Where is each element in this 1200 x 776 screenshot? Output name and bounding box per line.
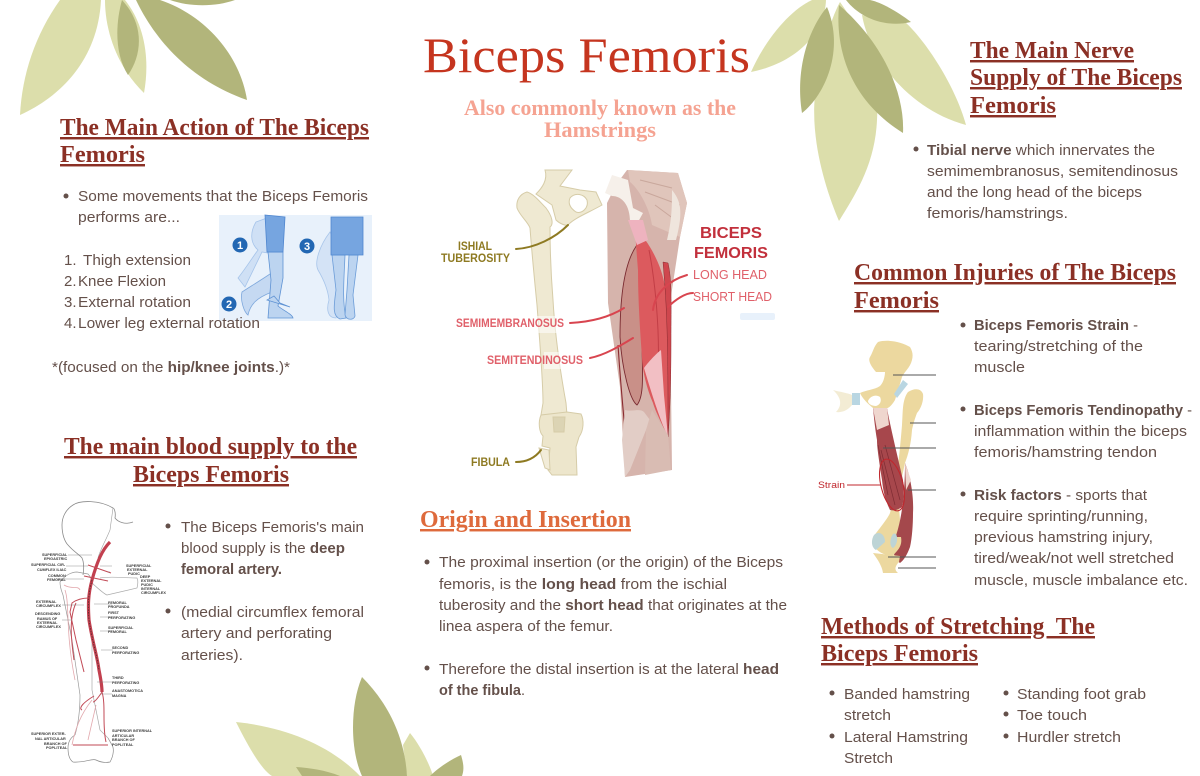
image: hamstring strain diagram [818,341,936,573]
text: common injuries [960,317,1192,589]
text: blood supply: The Biceps Femoris's main [181,519,364,536]
text: main action list: Lower leg external rotation [78,315,260,332]
text: blood supply: (medial circumflex femoral [181,604,364,621]
tendon and lower muscle highlight [644,350,668,437]
image: hamstring movement diagram: 1 [237,240,243,252]
image: femoral artery diagram: INTERNAL [141,587,161,591]
label lines [516,225,693,462]
decorative leaves: top left [20,0,247,115]
text: nerve supply: semimembranosus, semitendinosus [927,163,1178,180]
image: femoral artery diagram: RAMUS OF [37,617,58,621]
image: hamstring movement diagram: 3 [304,241,310,253]
text: common injuries: Risk factors - sports that [974,487,1148,504]
text: origin and insertion: femoris, is the long head from the ischial [439,576,727,593]
hip bone [517,170,602,475]
heading: blood supply: Biceps Femoris [133,461,289,488]
text: common injuries: previous hamstring injury, [974,529,1153,546]
text: common injuries: muscle [974,359,1025,376]
text: origin and insertion: tuberosity and the short head that originates at the [439,597,787,614]
text: origin and insertion [424,554,787,699]
text: origin and insertion: Therefore the distal insertion is at the lateral head [439,661,779,678]
image: femoral artery diagram: SUPERFICIAL [108,626,134,630]
leg outline [607,170,687,477]
text: common injuries: femoris/hamstring tendon [974,444,1157,461]
text: main action list [52,188,368,376]
heading: stretching methods [821,613,1095,667]
femur shaft and trochanter [517,192,567,415]
translucent label patches on the bone [536,316,564,333]
text: common injuries: Biceps Femoris Strain - [974,317,1138,334]
left pubic bone [833,390,852,412]
anatomy labels: FIBULA [471,457,510,469]
anatomy labels: ISHIAL [458,241,492,253]
heading: nerve supply: Supply of The Biceps [970,64,1182,91]
text: main action list: 3. [64,294,77,311]
image: femoral artery diagram: FEMORAL [47,578,66,582]
image: femoral artery diagram: DEEP [140,575,151,579]
text: common injuries: tearing/stretching of the [974,338,1143,355]
image: femoral artery diagram: MAGNA [112,694,127,698]
text: stretching methods, column two: Toe touch [1017,707,1087,724]
text: origin and insertion: The proximal insertion (or the origin) of the Biceps [439,554,783,571]
anatomy labels: TUBEROSITY [441,253,510,265]
text: main action list: Thigh extension [83,252,191,269]
image: femoral artery diagram: THIRD [112,676,124,680]
text: blood supply [166,519,364,664]
knee caps and tibia [873,537,901,556]
text: main action list: External rotation [78,294,191,311]
image: femoral artery diagram: POPLITEAL [46,746,68,750]
text: stretching methods, column one [830,686,970,767]
pubic symphysis [852,393,860,405]
text: blood supply: artery and perforating [181,625,332,642]
image: hamstring strain diagram: Strain [818,480,845,490]
title: Biceps Femoris [423,27,750,83]
image: femoral artery diagram: PROFUNDA [108,605,130,609]
image: femoral artery diagram: CIRCUMFLEX [36,625,61,629]
text: origin and insertion: linea aspera of the femur. [439,618,613,635]
text: main action list: 2. [64,273,77,290]
image: femoral artery diagram: EXTERNAL [37,621,58,625]
image: femoral artery diagram [31,502,166,762]
heading: nerve supply: Femoris [970,92,1056,119]
long head [635,228,668,437]
heading: blood supply [64,433,357,488]
heading: main action [60,114,369,168]
strain ellipse [875,457,909,513]
image: femoral artery diagram: PERFORATING [112,681,139,685]
heading: blood supply: The main blood supply to the [64,433,357,460]
text: common injuries: muscle, muscle imbalance etc. [974,572,1188,589]
anatomy labels [441,225,772,469]
image: femoral artery diagram: SUPERIOR EXTER- [31,732,67,736]
anatomy labels: FEMORIS [694,245,768,262]
image: femoral artery diagram: SECOND [112,646,129,650]
image: femoral artery diagram: SUPERFICIAL CIR- [31,563,66,567]
text: stretching methods, column one: stretch [844,707,891,724]
text: nerve supply: and the long head of the biceps [927,184,1142,201]
anatomy labels: BICEPS [700,225,762,242]
text: stretching methods, column one: Stretch [844,750,893,767]
text: blood supply: femoral artery. [181,561,282,578]
image: femoral artery diagram: BRANCH OF [112,738,135,742]
heading: main action: Femoris [60,141,145,168]
image: femoral artery diagram: FEMORAL [108,601,127,605]
subtitle: Hamstrings [544,117,656,142]
image: femoral artery diagram: EXTERNAL [141,579,162,583]
anatomy labels: SHORT HEAD [693,289,772,304]
text: stretching methods, column one: Banded hamstring [844,686,970,703]
short head [663,262,671,437]
image: femoral artery diagram: PUDIC [141,583,153,587]
image: femoral artery diagram: FEMORAL [108,630,127,634]
image: hamstring movement diagram: 2 [226,299,232,311]
heading: common injuries [854,259,1176,314]
text: blood supply: blood supply is the deep [181,540,345,557]
image: femoral artery diagram: BRANCH OF [44,742,67,746]
text: nerve supply: Tibial nerve which innervates the [927,142,1155,159]
anatomy labels: SEMIMEMBRANOSUS [456,318,564,330]
image: femoral artery diagram: DESCENDING [35,612,60,616]
heading: stretching methods: Biceps Femoris [821,640,978,667]
anatomy labels: SEMITENDINOSUS [487,355,583,367]
heading: common injuries: Femoris [854,287,939,314]
text: common injuries: require sprinting/running, [974,508,1148,525]
text: common injuries: Biceps Femoris Tendinopathy - [974,402,1192,419]
image: femoral artery diagram: NAL ARTICULAR [35,737,66,741]
image: femoral artery diagram: SUPERIOR INTERNAL [112,729,153,733]
image: hamstring movement diagram [219,215,372,321]
text: main action list: 4. [64,315,77,332]
heading: stretching methods: Methods of Stretching The [821,613,1095,640]
heading: nerve supply: The Main Nerve [970,37,1134,64]
heading: nerve supply [970,37,1182,119]
image: femoral artery diagram: ANASTOMOTICA [112,689,143,693]
text: blood supply: arteries). [181,647,243,664]
image: femoral artery diagram: PERFORATING [112,651,139,655]
image: femoral artery diagram: CIRCUMFLEX [141,591,166,595]
text: nerve supply: femoris/hamstrings. [927,205,1068,222]
text: common injuries: inflammation within the biceps [974,423,1187,440]
text: stretching methods, column one: Lateral Hamstring [844,729,968,746]
image: femoral artery diagram: FIRST [108,611,120,615]
decorative leaves: top right [751,0,966,221]
subtitle [464,95,736,142]
image: femoral artery diagram: SUPERFICIAL [42,553,68,557]
image: femoral artery diagram: SUPERFICIAL [126,564,152,568]
heading: origin and insertion: Origin and Insertion [420,506,631,533]
text: stretching methods, column two: Hurdler stretch [1017,729,1121,746]
text: main action list: 1. [64,252,77,269]
text: common injuries: tired/weak/not well stretched [974,550,1174,567]
text: main action list: *(focused on the hip/knee joints.)* [52,359,290,376]
image: femoral artery diagram: ARTICULAR [112,734,134,738]
image: femoral artery diagram: CIRCUMFLEX [36,604,61,608]
hamstring muscle [873,408,904,510]
text: main action list: performs are... [78,209,180,226]
image: thigh anatomy illustration [441,170,775,477]
subtitle: Also commonly known as the [464,95,736,120]
knee and lower leg [539,412,583,475]
text: nerve supply [914,142,1178,222]
pointer lines [883,375,936,568]
image: femoral artery diagram: EPIGASTRIC [44,557,67,561]
image: femoral artery diagram: PUDIC [128,572,140,576]
image: femoral artery diagram: COMMON [48,574,66,578]
text: stretching methods, column two: Standing foot grab [1017,686,1146,703]
heading: main action: The Main Action of The Biceps [60,114,369,141]
text: main action list: Some movements that the Biceps Femoris [78,188,368,205]
anatomy labels: LONG HEAD [693,267,767,282]
text: origin and insertion: of the fibula. [439,682,525,699]
image: femoral artery diagram: PERFORATING [108,616,135,620]
image: femoral artery diagram: EXTERNAL [36,600,57,604]
hip bone [860,341,913,408]
decorative leaves: bottom centre [236,677,463,776]
semimembranosus and semitendinosus [620,245,643,405]
image: femoral artery diagram: POPLITEAL [112,743,134,747]
text: main action list: Knee Flexion [78,273,166,290]
heading: common injuries: Common Injuries of The Biceps [854,259,1176,286]
femur [873,389,923,537]
image: femoral artery diagram: CUMFLEX ILIAC [37,568,67,572]
short head muscle [892,463,913,563]
image: femoral artery diagram: EXTERNAL [127,568,148,572]
text: stretching methods, column two [1004,686,1146,746]
